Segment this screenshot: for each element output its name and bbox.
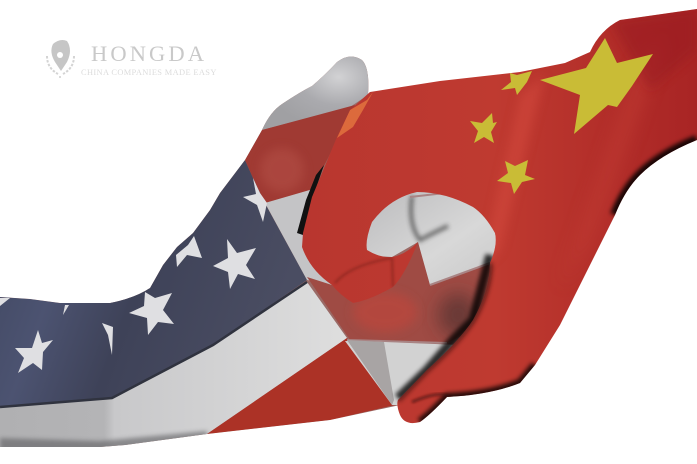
backing fill under flag parts — [0, 50, 530, 450]
lighter fabric band right — [560, 40, 665, 290]
white stripe on forearm — [0, 282, 347, 447]
star one — [15, 330, 53, 373]
lighter fabric band — [490, 86, 539, 259]
star five — [243, 178, 267, 222]
thumb crease at lower hand — [412, 394, 450, 402]
partial star eight — [0, 298, 10, 306]
logo tagline: CHINA COMPANIES MADE EASY — [81, 68, 217, 77]
darker upper right band — [610, 9, 697, 90]
thumb white — [262, 56, 368, 130]
palm crease under fist — [335, 258, 393, 287]
logo wordmark: HONGDA — [91, 41, 207, 66]
partial star six — [102, 323, 113, 355]
finger gap shadow — [411, 196, 448, 240]
Chinese flag hand and arm — [290, 0, 697, 440]
dark edge inner hand — [398, 263, 490, 400]
small yellow star one — [501, 71, 532, 95]
small yellow star three — [497, 160, 535, 194]
red overlap diagonal — [307, 242, 500, 343]
red flag base — [290, 0, 697, 440]
grey overlap of white stripe — [347, 340, 394, 405]
wrist red highlight — [263, 151, 301, 189]
red overlap highlight — [353, 292, 417, 332]
forearm lower shading — [0, 429, 209, 447]
star four — [176, 236, 202, 267]
dark bottom edge — [420, 365, 535, 422]
orange knuckle patch — [337, 92, 373, 138]
white stars on American flag — [0, 178, 267, 373]
white fingers in fist — [366, 192, 496, 285]
dark lower right edge — [615, 140, 697, 215]
star three — [213, 239, 256, 289]
white stripe near wrist — [265, 187, 332, 285]
stripe stitch line — [0, 282, 307, 407]
large yellow star — [540, 38, 653, 134]
stripe stitching across fingers — [347, 193, 490, 343]
red stripe on wrist — [245, 105, 355, 203]
partial star seven — [63, 305, 69, 315]
hand edge shadow — [398, 255, 490, 398]
red stripe on forearm — [207, 338, 395, 434]
star two — [129, 292, 174, 335]
small yellow star two — [470, 113, 497, 143]
navy canton — [0, 160, 307, 407]
icon: pen nib with laurel — [47, 40, 74, 78]
logo: Hongda — [47, 40, 217, 78]
American flag hand and arm — [0, 50, 530, 452]
dark shadow in palm — [438, 293, 478, 337]
black gap between hands — [297, 165, 324, 235]
white stripe at base of hand — [345, 341, 460, 405]
